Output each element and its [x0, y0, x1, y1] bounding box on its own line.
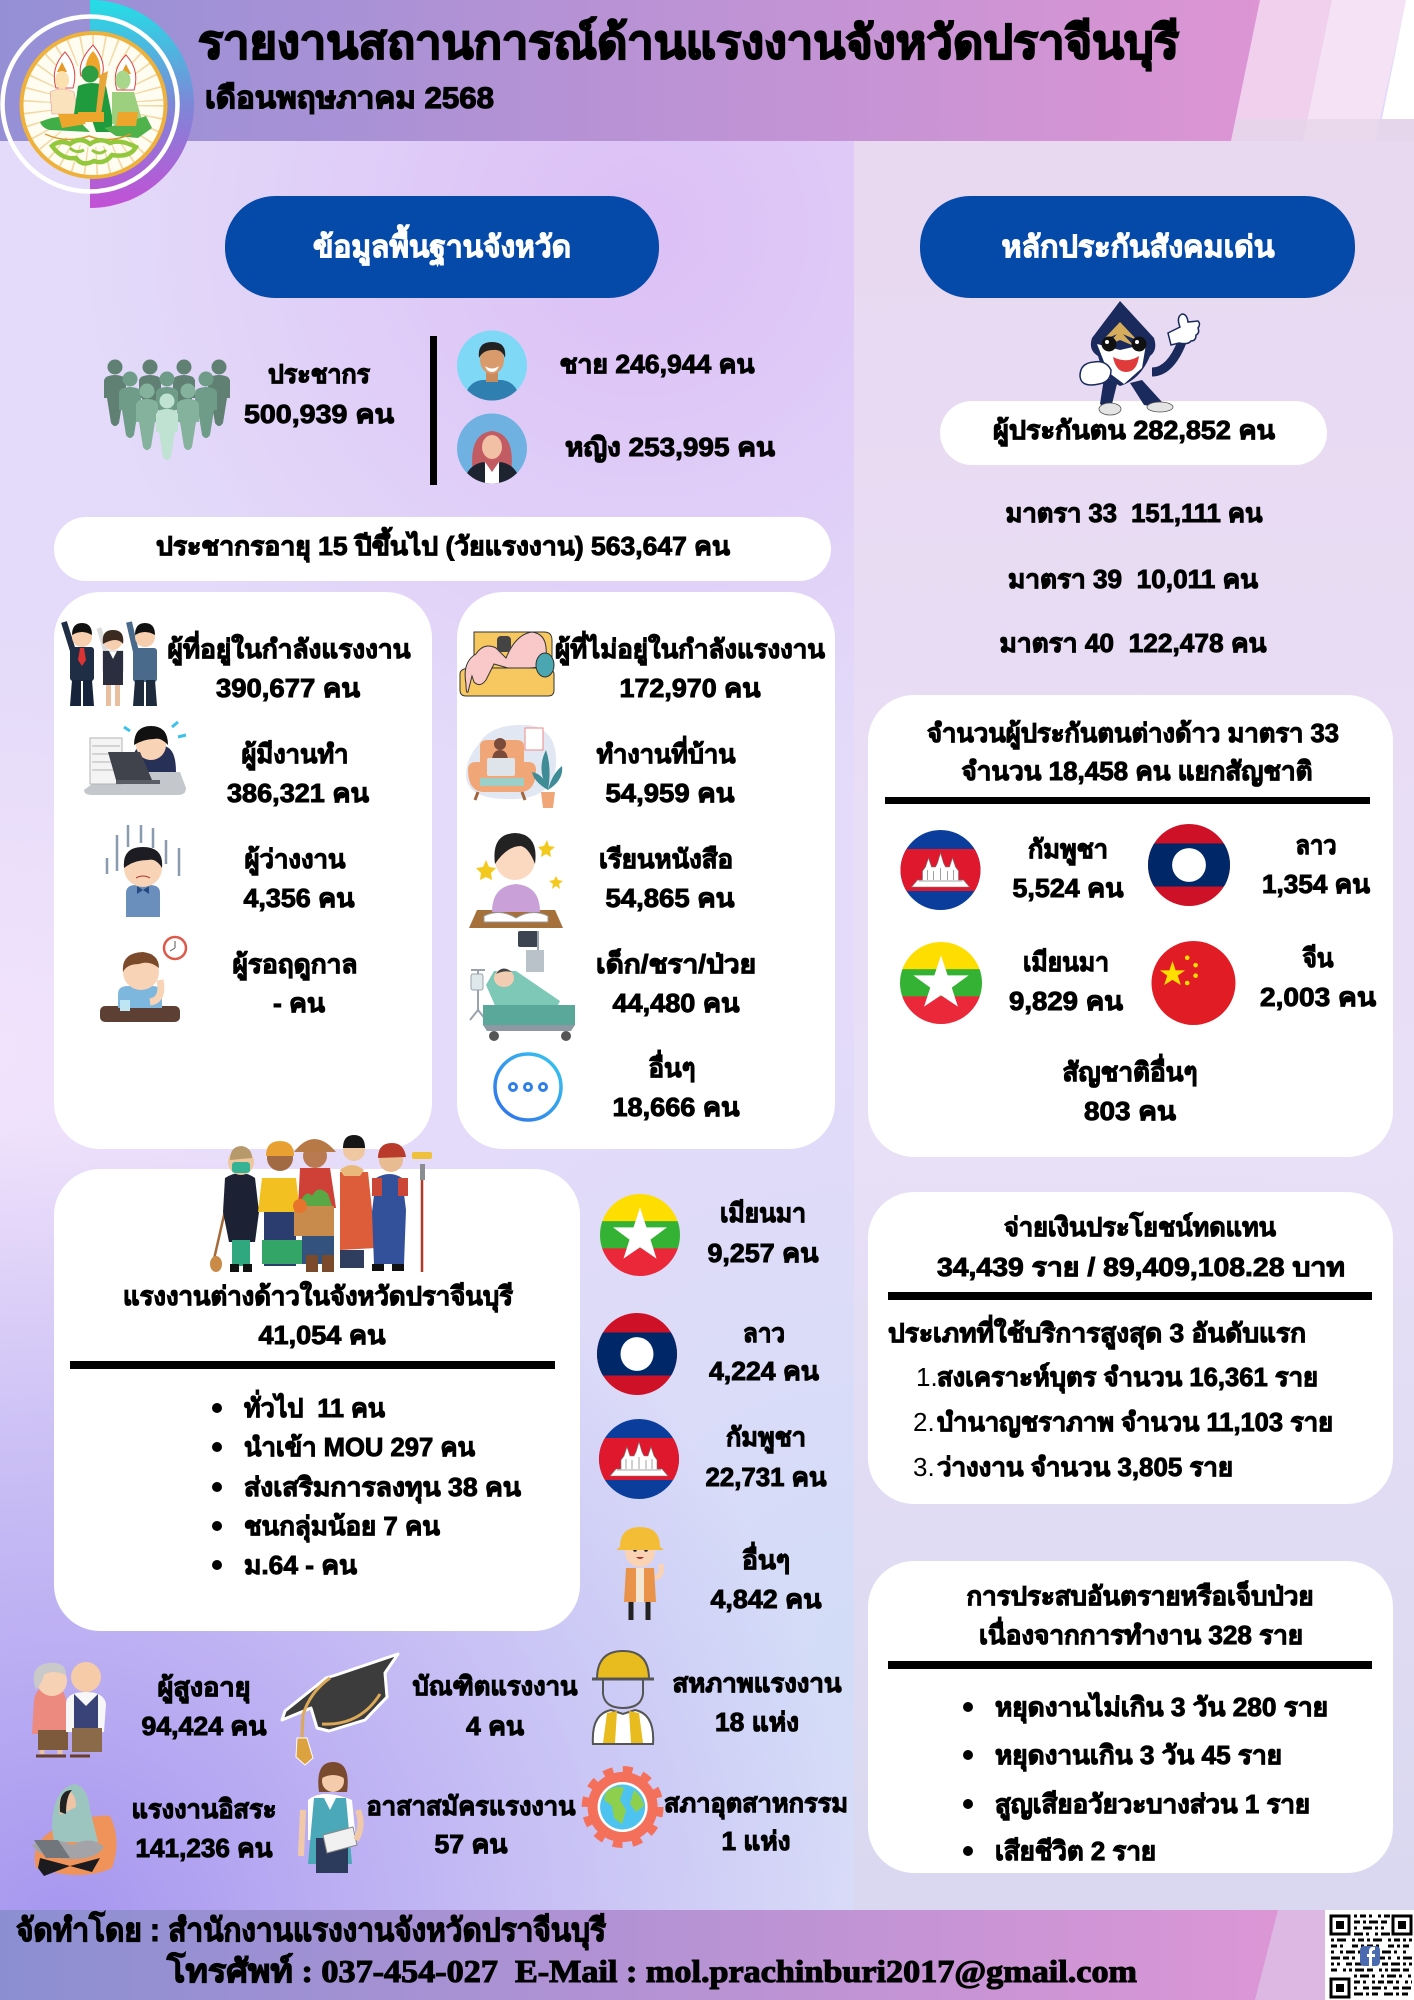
migrant total — [123, 1281, 513, 1350]
migrant nationalities — [597, 1194, 827, 1620]
elderly — [142, 1672, 267, 1741]
labour unions — [672, 1668, 842, 1737]
child, elderly, ill: เด็ก/ชรา/ป่วย — [596, 948, 756, 979]
China insured — [1260, 943, 1376, 1012]
injuries heading: การประสบอันตรายหรือเจ็บป่วย — [966, 1580, 1314, 1611]
QR code — [1325, 1910, 1414, 2000]
other: อื่นๆ — [648, 1049, 696, 1083]
studying: เรียนหนังสือ — [599, 844, 733, 874]
icon: working at home — [466, 725, 562, 808]
migrant categories list: ชนกลุ่มน้อย 7 คน — [244, 1511, 440, 1543]
panel: in the labour force — [54, 592, 432, 1149]
Laos count — [709, 1318, 819, 1386]
other — [612, 1049, 740, 1122]
other count — [710, 1541, 822, 1614]
migrant categories list: ทั่วไป 11 คน — [244, 1389, 385, 1423]
Laos insured: ลาว — [1296, 830, 1336, 860]
icon: volunteer — [301, 1762, 361, 1873]
divider — [430, 336, 437, 485]
labour volunteers: อาสาสมัครแรงงาน — [366, 1791, 576, 1821]
labour unions: 18 แห่ง — [715, 1707, 799, 1737]
Cambodia count — [706, 1422, 827, 1492]
Myanmar insured: เมียนมา — [1023, 947, 1109, 977]
unemployed — [244, 844, 355, 913]
unemployed: 4,356 คน — [244, 883, 355, 913]
Myanmar insured: 9,829 คน — [1009, 986, 1123, 1016]
freelance labour: 141,236 คน — [136, 1833, 273, 1863]
icon: hospital bed — [470, 931, 575, 1041]
seasonal — [232, 949, 358, 1018]
unemployed: ผู้ว่างงาน — [244, 844, 346, 876]
child, elderly, ill: 44,480 คน — [612, 988, 740, 1018]
labour volunteers — [366, 1791, 576, 1859]
panel: population — [104, 330, 775, 488]
top three list: สงเคราะห์บุตร จำนวน 16,361 ราย — [937, 1362, 1318, 1394]
working age bar: ประชากรอายุ 15 ปีขึ้นไป (วัยแรงงาน) 563,647 คน — [156, 526, 730, 563]
flag: China — [1152, 941, 1236, 1025]
migrant categories list — [212, 1389, 521, 1580]
article 40: มาตรา 40 122,478 คน — [1000, 628, 1267, 658]
labour force total: 390,677 คน — [216, 673, 360, 703]
icon: graduation cap — [282, 1654, 398, 1765]
subtitle: month: เดือนพฤษภาคม 2568 — [205, 82, 494, 115]
flag: Cambodia — [900, 830, 980, 910]
icon: crowd — [104, 360, 230, 460]
footer: prepared by: จัดทำโดย : สำนักงานแรงงานจังหวัดปราจีนบุรี — [16, 1911, 606, 1951]
Cambodia insured — [1012, 834, 1124, 903]
studying — [599, 844, 735, 913]
child, elderly, ill — [596, 948, 756, 1018]
employed: ผู้มีงานทำ — [242, 739, 348, 771]
employed — [227, 739, 369, 808]
labour graduates: บัณฑิตแรงงาน — [412, 1671, 578, 1701]
male count: ชาย 246,944 คน — [560, 349, 755, 379]
header banner — [0, 0, 1414, 141]
heading pill: social security: หลักประกันสังคมเด่น — [1002, 231, 1275, 264]
panel: not in the labour force — [457, 592, 835, 1149]
other nationalities — [1062, 1053, 1198, 1126]
Laos count: 4,224 คน — [709, 1356, 819, 1386]
article 39: มาตรา 39 10,011 คน — [1008, 564, 1258, 594]
icon: person at laptop — [84, 722, 186, 795]
working age bar — [54, 517, 831, 581]
article 33: มาตรา 33 151,111 คน — [1006, 498, 1263, 528]
Laos count: ลาว — [743, 1318, 785, 1348]
injuries list: สูญเสียอวัยวะบางส่วน 1 ราย — [995, 1789, 1310, 1821]
icon: social security mascot — [1080, 301, 1200, 415]
other count: อื่นๆ — [742, 1541, 790, 1575]
injuries list — [963, 1691, 1328, 1866]
insured total: ผู้ประกันตน 282,852 คน — [993, 415, 1275, 447]
other count: 4,842 คน — [710, 1584, 822, 1614]
employed: 386,321 คน — [227, 778, 369, 808]
icon: unemployed sad person — [107, 825, 179, 917]
flag: Cambodia — [599, 1419, 679, 1499]
foreign insured heading: จำนวน 18,458 คน แยกสัญชาติ — [962, 756, 1312, 787]
migrant total: 41,054 คน — [258, 1320, 386, 1350]
Myanmar count: 9,257 คน — [708, 1238, 819, 1268]
work at home — [596, 735, 736, 808]
injuries list: เสียชีวิต 2 ราย — [995, 1836, 1156, 1866]
icon: other dots — [495, 1054, 561, 1120]
Myanmar insured — [1009, 947, 1123, 1016]
benefits heading: จ่ายเงินประโยชน์ทดแทน — [1004, 1211, 1276, 1242]
elderly: ผู้สูงอายุ — [158, 1672, 250, 1704]
foreign insured heading — [927, 718, 1339, 787]
population total — [244, 359, 394, 429]
panel: insured mascot — [940, 301, 1327, 658]
icon: three workers — [64, 622, 157, 706]
injuries list: หยุดงานเกิน 3 วัน 45 ราย — [995, 1740, 1282, 1772]
seasonal: ผู้รอฤดูกาล — [232, 949, 358, 981]
injuries heading: เนื่องจากการทำงาน 328 ราย — [979, 1616, 1303, 1650]
migrant categories list: ม.64 - คน — [244, 1550, 357, 1580]
insured total — [940, 401, 1327, 465]
migrant categories list: นำเข้า MOU 297 คน — [244, 1432, 475, 1462]
icon: helmet worker — [616, 1527, 664, 1620]
Myanmar count: เมียนมา — [720, 1198, 806, 1228]
freelance labour: แรงงานอิสระ — [132, 1794, 276, 1824]
population total: 500,939 คน — [244, 399, 394, 429]
industrial council: สภาอุตสาหกรรม — [664, 1788, 848, 1820]
labour graduates: 4 คน — [466, 1711, 524, 1741]
panel: compensation benefits — [868, 1192, 1393, 1504]
top three list: ว่างงาน จำนวน 3,805 ราย — [937, 1452, 1233, 1482]
industrial council: 1 แห่ง — [722, 1826, 790, 1856]
migrant categories list: ส่งเสริมการลงทุน 38 คน — [244, 1472, 521, 1504]
flag: Myanmar — [900, 942, 982, 1024]
labour force total — [168, 630, 411, 703]
other: 18,666 คน — [612, 1092, 740, 1122]
icon: workers group — [210, 1135, 432, 1272]
seasonal: - คน — [273, 988, 325, 1018]
top three list: 2. — [913, 1407, 935, 1437]
labour unions: สหภาพแรงงาน — [672, 1668, 842, 1698]
heading pill: provincial data — [225, 196, 659, 298]
labour graduates — [412, 1671, 578, 1741]
heading pill: provincial data: ข้อมูลพื้นฐานจังหวัด — [313, 224, 571, 267]
foreign insured heading: จำนวนผู้ประกันตนต่างด้าว มาตรา 33 — [927, 718, 1339, 750]
top three list — [913, 1362, 1333, 1482]
outside labour force total — [555, 630, 825, 703]
work at home: ทำงานที่บ้าน — [596, 735, 736, 769]
elderly: 94,424 คน — [142, 1711, 267, 1741]
migrant total: แรงงานต่างด้าวในจังหวัดปราจีนบุรี — [123, 1281, 513, 1313]
title: รายงานสถานการณ์ด้านแรงงานจังหวัดปราจีนบุรี — [198, 16, 1179, 71]
labour force total: ผู้ที่อยู่ในกำลังแรงงาน — [168, 630, 411, 666]
icon: woman — [457, 414, 527, 488]
top three list: บำนาญชราภาพ จำนวน 11,103 ราย — [937, 1407, 1333, 1438]
flag: Laos — [597, 1313, 677, 1395]
other nationalities: สัญชาติอื่นๆ — [1062, 1053, 1198, 1088]
studying: 54,865 คน — [606, 883, 735, 913]
benefits heading — [937, 1211, 1345, 1282]
labour volunteers: 57 คน — [434, 1829, 508, 1859]
heading pill: social security — [920, 196, 1355, 298]
Myanmar count — [708, 1198, 819, 1268]
freelance labour — [132, 1794, 276, 1863]
injuries heading — [966, 1580, 1314, 1650]
icon: gear globe — [588, 1772, 658, 1842]
top three list: 3. — [913, 1452, 935, 1482]
work at home: 54,959 คน — [606, 778, 735, 808]
Cambodia count: กัมพูชา — [726, 1422, 806, 1454]
icon: man — [457, 330, 527, 402]
panel: work injuries — [868, 1561, 1393, 1873]
icon: waiting person with clock — [100, 937, 186, 1022]
icon: studying girl — [469, 833, 563, 928]
Laos insured — [1262, 830, 1370, 899]
population total: ประชากร — [268, 359, 370, 389]
panel: migrant workers — [54, 1135, 580, 1631]
flag: Laos — [1148, 824, 1230, 906]
Cambodia insured: กัมพูชา — [1028, 834, 1108, 866]
Cambodia count: 22,731 คน — [706, 1462, 827, 1492]
panel: foreign insured — [868, 695, 1393, 1157]
injuries list: หยุดงานไม่เกิน 3 วัน 280 ราย — [995, 1691, 1328, 1724]
Cambodia insured: 5,524 คน — [1012, 873, 1124, 903]
other nationalities: 803 คน — [1084, 1096, 1176, 1126]
footer banner — [0, 1910, 1414, 2000]
female count: หญิง 253,995 คน — [565, 432, 775, 463]
icon: person resting on sofa — [460, 632, 554, 696]
logo: provincial labour seal — [2, 0, 194, 208]
flag: Myanmar — [600, 1194, 680, 1276]
outside labour force total: 172,970 คน — [620, 673, 761, 703]
top three heading: ประเภทที่ใช้บริการสูงสุด 3 อันดับแรก — [888, 1314, 1306, 1350]
outside labour force total: ผู้ที่ไม่อยู่ในกำลังแรงงาน — [555, 630, 825, 666]
Laos insured: 1,354 คน — [1262, 869, 1370, 899]
footer: contact: โทรศัพท์ : 037-454-027 E-Mail : mol.prachinburi2017@gmail.com — [166, 1952, 1137, 1989]
benefits heading: 34,439 ราย / 89,409,108.28 บาท — [937, 1252, 1345, 1282]
industrial council — [664, 1788, 848, 1856]
panel: labour groups — [32, 1651, 848, 1876]
China insured: 2,003 คน — [1260, 982, 1376, 1012]
top three list: 1. — [916, 1362, 938, 1392]
China insured: จีน — [1302, 943, 1334, 973]
icon: elderly couple — [32, 1662, 106, 1756]
icon: hardhat outline worker — [592, 1651, 654, 1744]
icon: freelance worker — [32, 1784, 117, 1876]
